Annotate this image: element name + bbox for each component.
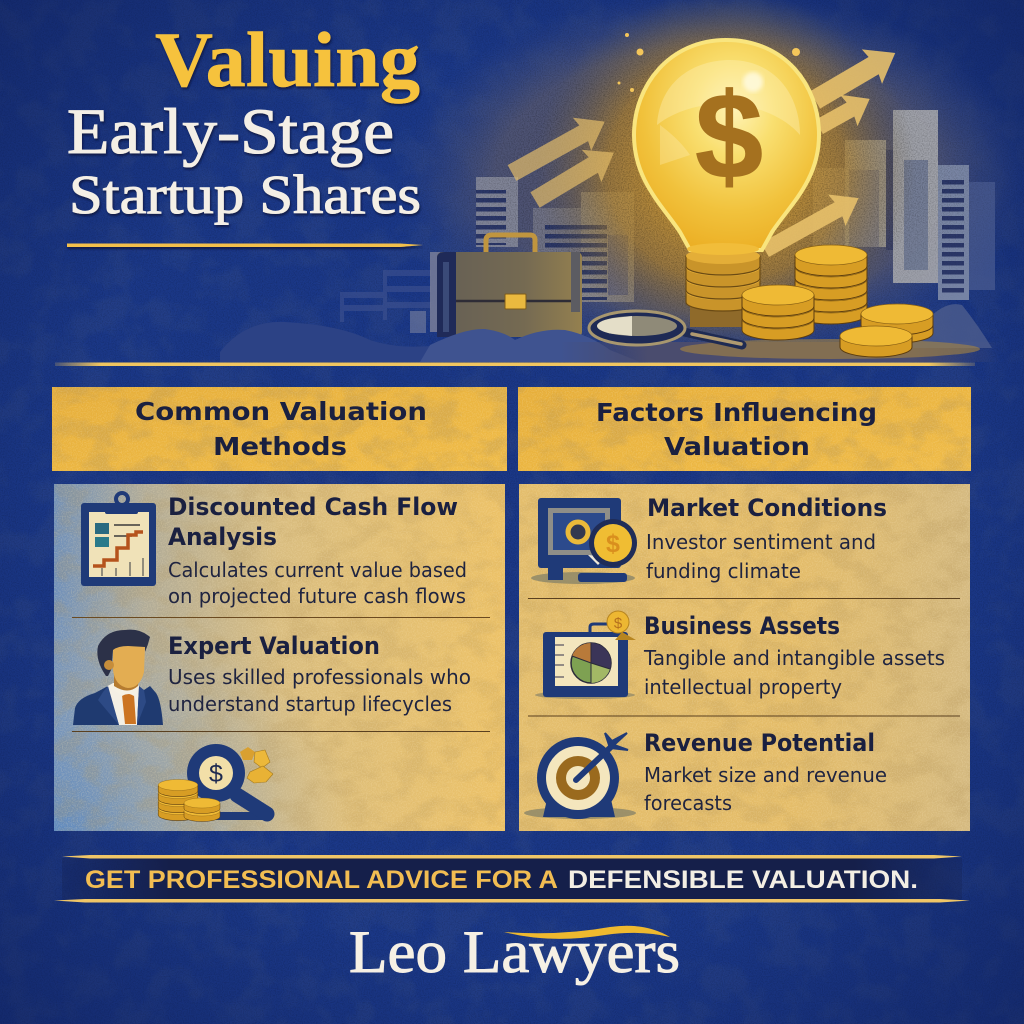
icon: expert person bbox=[73, 630, 163, 725]
title line: Startup Shares: Startup Shares bbox=[69, 164, 421, 225]
icon: coins and magnifier: $ bbox=[209, 760, 223, 788]
left faint buildings bbox=[340, 270, 431, 333]
glow behind bulb bbox=[536, 0, 916, 350]
divider under hero bbox=[55, 362, 975, 366]
panel: common valuation methods header bbox=[52, 387, 507, 471]
icon: business assets chart: $ bbox=[614, 615, 623, 632]
icon: business assets chart bbox=[535, 611, 636, 699]
icon: light bulb with dollar: $ bbox=[695, 68, 763, 204]
panel: common valuation methods bbox=[54, 484, 505, 831]
icon: target with arrow bbox=[524, 733, 636, 819]
panel: factors influencing valuation header: Valuation bbox=[664, 432, 810, 461]
title line: Early-Stage: Early-Stage bbox=[67, 96, 394, 168]
sparkles bbox=[618, 33, 800, 92]
item: expert valuation: Expert Valuation bbox=[168, 632, 380, 660]
item: revenue potential: forecasts bbox=[644, 791, 732, 815]
icon: coins and magnifier bbox=[158, 744, 273, 822]
item: revenue potential: Market size and revenue bbox=[644, 763, 887, 787]
panel: factors influencing valuation header bbox=[518, 387, 971, 471]
item: expert valuation: Uses skilled professionals who bbox=[168, 665, 471, 689]
hills and ground bbox=[220, 304, 1000, 362]
item: expert valuation bbox=[168, 632, 471, 716]
item: business assets bbox=[643, 612, 945, 699]
item: business assets: intellectual property bbox=[644, 675, 842, 699]
bulb base bbox=[686, 243, 760, 327]
growth arrows bbox=[503, 36, 905, 266]
item: discounted cash flow: on projected future cash flows bbox=[168, 584, 466, 608]
item: market conditions: Market Conditions bbox=[647, 494, 887, 522]
logo bbox=[349, 919, 680, 985]
item: market conditions: funding climate bbox=[646, 559, 801, 583]
item: business assets: Tangible and intangible assets bbox=[643, 646, 945, 670]
cta text white: DEFENSIBLE VALUATION. bbox=[568, 866, 918, 894]
hero illustration bbox=[220, 0, 1024, 370]
coin stacks bbox=[742, 245, 933, 357]
logo swoosh bbox=[504, 926, 670, 939]
item: discounted cash flow: Analysis bbox=[168, 523, 277, 551]
item: discounted cash flow: Calculates current value based bbox=[168, 558, 467, 582]
logo wordmark: Leo Lawyers bbox=[349, 919, 680, 985]
item: business assets: Business Assets bbox=[644, 612, 840, 640]
item: discounted cash flow bbox=[168, 493, 467, 608]
item: market conditions: Investor sentiment and bbox=[646, 530, 876, 554]
icon: briefcase bbox=[430, 235, 582, 337]
item: revenue potential: Revenue Potential bbox=[644, 729, 875, 757]
call to action banner bbox=[54, 855, 970, 902]
header text: Factors Influencing bbox=[596, 398, 877, 427]
item: revenue potential bbox=[644, 729, 887, 815]
icon: clipboard chart bbox=[81, 493, 156, 586]
cta text gold: GET PROFESSIONAL ADVICE FOR A bbox=[85, 866, 558, 894]
title underline bbox=[67, 244, 423, 247]
panel: common valuation methods header: Methods bbox=[213, 432, 347, 461]
header text: Common Valuation bbox=[135, 397, 427, 426]
title bbox=[67, 16, 423, 247]
title line: Valuing: Valuing bbox=[155, 16, 420, 103]
item: market conditions bbox=[646, 494, 887, 583]
icon: light bulb with dollar bbox=[634, 40, 819, 327]
city skyline bbox=[476, 110, 995, 302]
panel: factors influencing valuation bbox=[519, 484, 970, 831]
item: expert valuation: understand startup lifecycles bbox=[168, 692, 452, 716]
icon: magnifying glass bbox=[589, 311, 742, 345]
item: discounted cash flow: Discounted Cash Flow bbox=[168, 493, 458, 521]
icon: monitor with coin bbox=[531, 498, 637, 584]
icon: monitor with coin: $ bbox=[606, 530, 620, 558]
